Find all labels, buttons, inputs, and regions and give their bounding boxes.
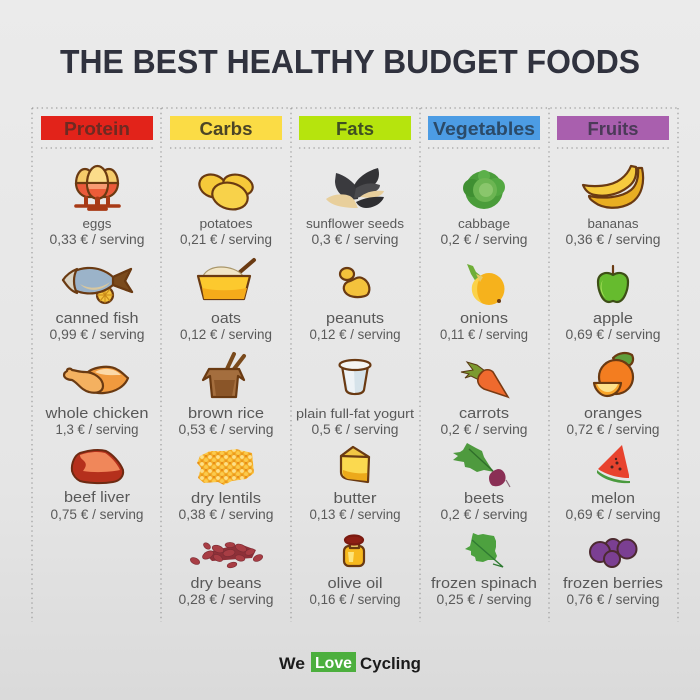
item: frozen spinach xyxy=(431,533,537,607)
panel: protein xyxy=(41,116,153,522)
panel: fruits xyxy=(557,116,669,607)
item: brown rice xyxy=(178,354,274,437)
price: apple: 0,69 € / serving xyxy=(566,327,660,342)
icon: chicken xyxy=(64,367,128,393)
icon: melon xyxy=(597,445,630,483)
label: eggs: eggs xyxy=(82,216,112,231)
label: frozen berries: frozen berries xyxy=(563,575,663,592)
label: brown rice: brown rice xyxy=(188,405,264,422)
icon: butter xyxy=(341,447,369,482)
price: peanuts: 0,12 € / serving xyxy=(310,327,400,342)
price: sunflower seeds: 0,3 € / serving xyxy=(312,232,398,247)
price: plain full-fat yogurt: 0,5 € / serving xyxy=(312,422,398,437)
price: melon: 0,69 € / serving xyxy=(566,507,660,522)
price: bananas: 0,36 € / serving xyxy=(566,232,660,247)
price: eggs: 0,33 € / serving xyxy=(50,232,144,247)
price: onions: 0,11 € / serving xyxy=(440,327,528,342)
price: oats: 0,12 € / serving xyxy=(180,327,272,342)
item: canned fish xyxy=(50,268,144,342)
icon: oats xyxy=(198,260,254,299)
label: bananas: bananas xyxy=(588,216,639,231)
label: olive oil: olive oil xyxy=(328,575,382,592)
heading: protein: Protein xyxy=(64,119,130,139)
icon: yogurt xyxy=(340,360,370,394)
label: cabbage: cabbage xyxy=(458,216,510,231)
heading: fats: Fats xyxy=(336,119,374,139)
icon: oranges xyxy=(594,353,633,396)
panel: carbs xyxy=(170,116,282,607)
label: apple: apple xyxy=(593,310,633,327)
item: beef liver xyxy=(50,450,144,522)
icon: lentils xyxy=(197,449,254,485)
heading: carbs xyxy=(170,116,282,140)
item: oats xyxy=(180,260,272,342)
item: bananas xyxy=(566,166,660,247)
label: plain full-fat yogurt: plain full-fat yogurt xyxy=(296,406,414,421)
price: brown rice: 0,53 € / serving xyxy=(178,422,274,437)
icon: olive oil xyxy=(344,536,364,566)
price: dry beans: 0,28 € / serving xyxy=(178,592,274,607)
item: cabbage xyxy=(440,170,528,247)
price: butter: 0,13 € / serving xyxy=(310,507,400,522)
icon: carrot xyxy=(461,362,508,397)
icon: rice box xyxy=(203,354,244,397)
price: olive oil: 0,16 € / serving xyxy=(310,592,400,607)
label: peanuts: peanuts xyxy=(326,310,384,327)
heading: fats xyxy=(299,116,411,140)
icon: apple xyxy=(598,266,628,302)
price: oranges: 0,72 € / serving xyxy=(566,422,660,437)
label: sunflower seeds: sunflower seeds xyxy=(306,216,405,231)
icon: fish xyxy=(63,268,132,303)
logo xyxy=(279,652,421,673)
panel: fats xyxy=(296,116,414,607)
item: peanuts xyxy=(310,268,400,342)
label: dry beans: dry beans xyxy=(190,575,262,592)
label: beef liver: beef liver xyxy=(64,489,130,506)
label: onions: onions xyxy=(460,310,508,327)
heading: vegetables: Vegetables xyxy=(433,119,535,139)
price: dry lentils: 0,38 € / serving xyxy=(178,507,274,522)
icon: peanuts xyxy=(340,268,369,297)
label: dry lentils: dry lentils xyxy=(191,490,261,507)
label: melon: melon xyxy=(591,490,635,507)
item: onions xyxy=(440,264,528,342)
price: frozen spinach: 0,25 € / serving xyxy=(436,592,532,607)
label: potatoes: potatoes xyxy=(200,216,253,231)
label: canned fish: canned fish xyxy=(56,310,138,327)
label: carrots: carrots xyxy=(459,405,509,422)
icon: cabbage xyxy=(463,170,505,209)
logo: Love xyxy=(315,655,352,672)
panel: vegetables xyxy=(428,116,540,607)
price: potatoes: 0,21 € / serving xyxy=(180,232,272,247)
logo: We xyxy=(279,655,305,673)
price: beef liver: 0,75 € / serving xyxy=(50,507,144,522)
label: whole chicken: whole chicken xyxy=(44,405,148,422)
price: cabbage: 0,2 € / serving xyxy=(440,232,528,247)
icon: berries xyxy=(590,539,636,567)
price: frozen berries: 0,76 € / serving xyxy=(566,592,660,607)
item: whole chicken xyxy=(44,367,148,437)
icon: onion xyxy=(467,264,504,305)
heading: fruits: Fruits xyxy=(588,119,638,139)
heading: protein xyxy=(41,116,153,140)
item: frozen berries xyxy=(563,539,663,607)
item: olive oil xyxy=(310,536,400,607)
heading: fruits xyxy=(557,116,669,140)
item: dry lentils xyxy=(178,449,274,522)
price: beets: 0,2 € / serving xyxy=(440,507,528,522)
label: frozen spinach: frozen spinach xyxy=(431,575,537,592)
item: beets xyxy=(440,443,528,522)
item: oranges xyxy=(566,353,660,437)
item: sunflower seeds xyxy=(306,168,405,247)
item: apple xyxy=(566,266,660,342)
title: THE BEST HEALTHY BUDGET FOODS xyxy=(60,43,640,80)
icon: beef liver xyxy=(72,450,123,483)
item: melon xyxy=(566,445,660,522)
label: butter: butter xyxy=(334,490,377,507)
item: eggs xyxy=(50,166,144,247)
item: plain full-fat yogurt xyxy=(296,360,414,437)
item: potatoes xyxy=(180,171,272,247)
label: oranges: oranges xyxy=(584,405,642,422)
heading: carbs: Carbs xyxy=(200,119,252,139)
icon: eggs xyxy=(76,166,119,209)
label: oats: oats xyxy=(211,310,241,327)
price: canned fish: 0,99 € / serving xyxy=(50,327,144,342)
item: carrots xyxy=(440,362,528,437)
logo: Cycling xyxy=(360,655,421,673)
heading: vegetables xyxy=(428,116,540,140)
icon: beets xyxy=(453,443,510,487)
price: carrots: 0,2 € / serving xyxy=(440,422,528,437)
icon: potatoes xyxy=(196,171,255,213)
icon: spinach xyxy=(465,533,503,567)
icon: bananas xyxy=(583,166,643,208)
icon: beans xyxy=(189,541,264,569)
icon: sunflower seeds xyxy=(326,168,384,208)
price: whole chicken: 1,3 € / serving xyxy=(56,422,138,437)
label: beets: beets xyxy=(464,490,504,507)
item: butter xyxy=(310,447,400,522)
item: dry beans xyxy=(178,541,274,607)
